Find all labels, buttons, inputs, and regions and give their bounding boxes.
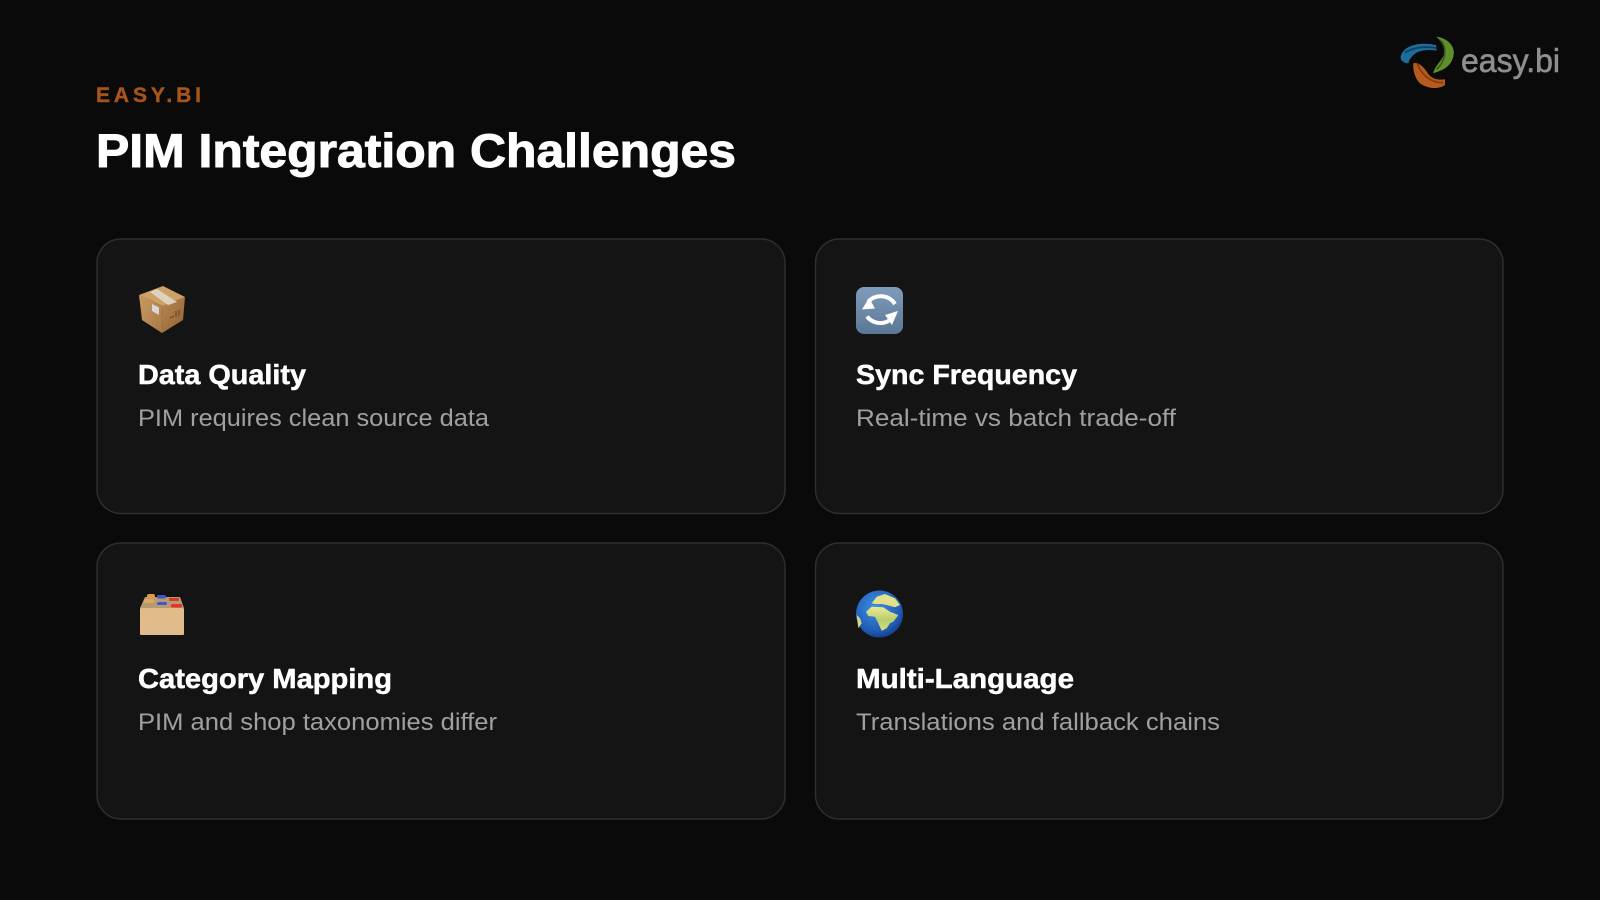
eyebrow label: EASY.BI: [96, 84, 201, 107]
icon: package box: [139, 286, 185, 333]
heading: Multi-Language: [856, 663, 1074, 694]
heading: Sync Frequency: [856, 359, 1077, 390]
icon: card index dividers: [140, 594, 184, 635]
icon: globe: [856, 590, 903, 638]
panel: Sync Frequency: [816, 239, 1503, 514]
description: Real-time vs batch trade-off: [856, 405, 1176, 432]
icon: sync arrows: [856, 287, 903, 334]
description: PIM requires clean source data: [138, 405, 490, 432]
logo wordmark: easy.bi: [1461, 42, 1560, 79]
description: Translations and fallback chains: [856, 709, 1220, 736]
panel: Multi-Language: [816, 543, 1503, 819]
heading: Category Mapping: [138, 663, 392, 694]
panel: Data Quality: [97, 239, 785, 514]
description: PIM and shop taxonomies differ: [138, 709, 497, 736]
heading: Data Quality: [138, 359, 306, 390]
title: PIM Integration Challenges: [96, 124, 736, 177]
logo: easy.bi: [1401, 37, 1560, 88]
panel: Category Mapping: [97, 543, 785, 819]
icon: logo mark: [1401, 37, 1454, 88]
